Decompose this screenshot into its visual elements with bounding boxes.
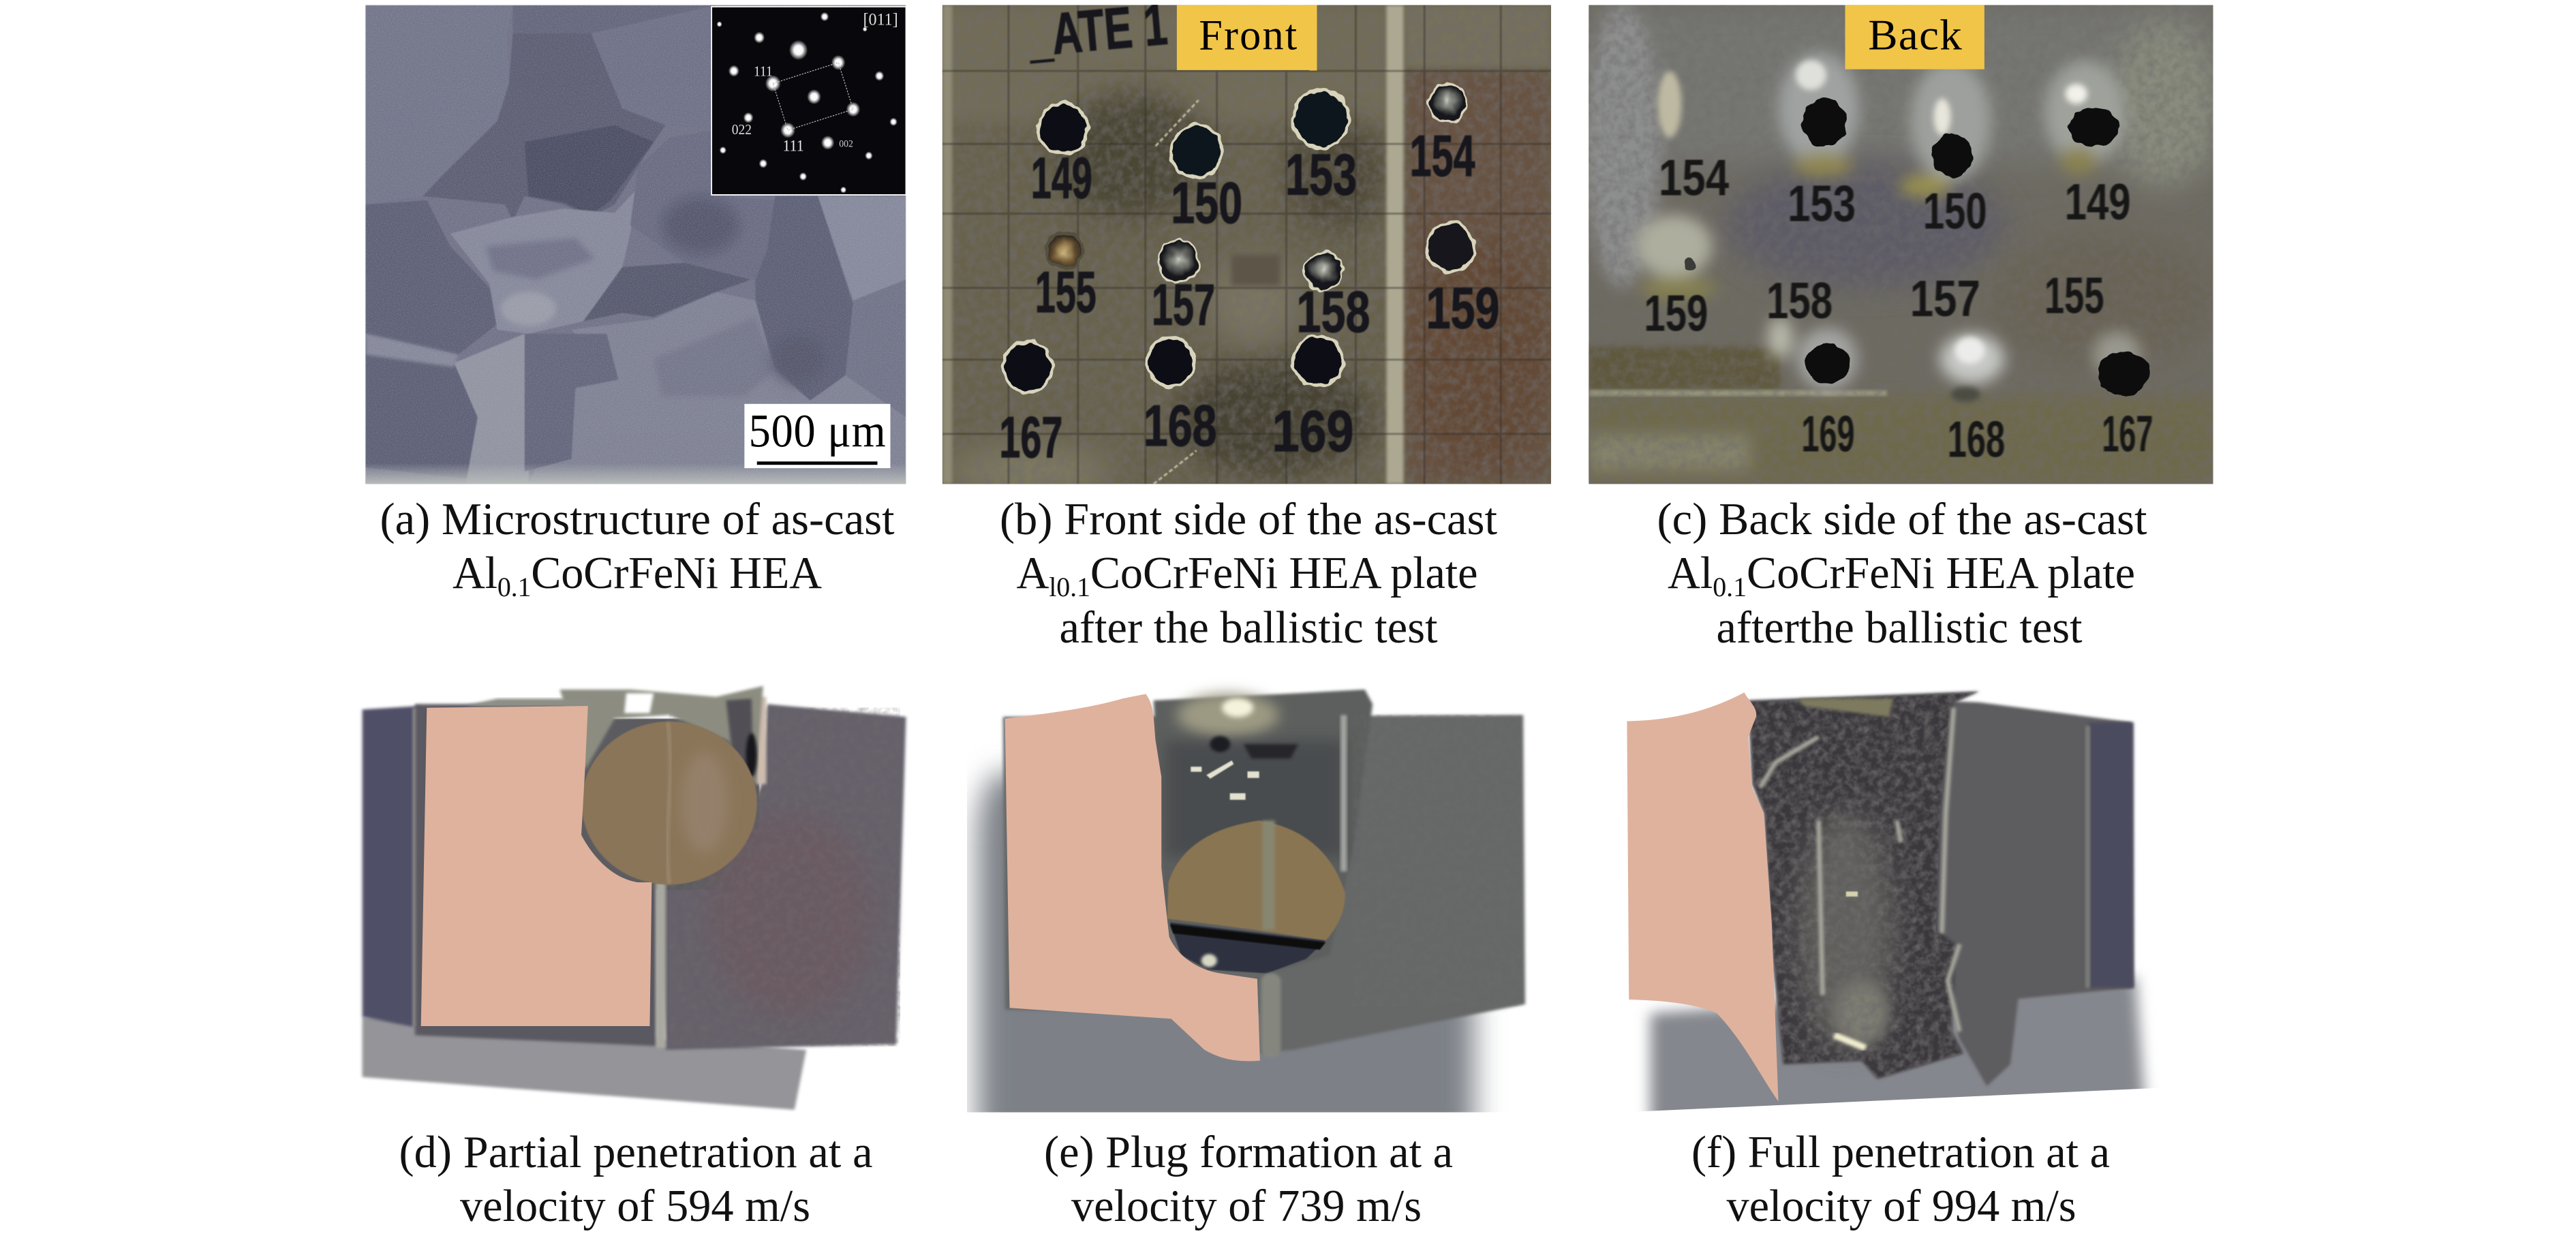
inset: diffraction pattern: 022: [732, 123, 752, 138]
caption b: A: [1017, 548, 1049, 598]
bullet holes, front: [1003, 84, 1474, 392]
label: Back: [1845, 5, 1984, 69]
caption f: [1691, 1128, 2110, 1231]
handwritten shot numbers, front: 150: [1171, 170, 1242, 235]
handwritten shot numbers, back: 149: [2065, 174, 2131, 230]
inset: diffraction pattern: [711, 7, 906, 195]
caption b: [1000, 495, 1498, 653]
handwritten shot numbers, back: 167: [2102, 405, 2153, 462]
inset: diffraction pattern: 002: [839, 138, 853, 150]
panel c: back side of plate: [1584, 4, 2219, 484]
handwritten shot numbers, back: 150: [1923, 183, 1987, 239]
fractured projectile: [1167, 820, 1345, 974]
caption a: 0.1: [497, 572, 531, 602]
caption e: velocity of 739 m/s: [1071, 1181, 1422, 1231]
bright plate dents: [1636, 52, 2141, 402]
handwritten shot numbers, back: 153: [1788, 175, 1856, 232]
caption b: (b) Front side of the as-cast: [1000, 495, 1498, 544]
panel d: partial penetration section: [363, 686, 906, 1110]
caption c: [1657, 495, 2147, 653]
caption b: after the ballistic test: [1059, 603, 1438, 653]
handwritten shot numbers, front: 167: [999, 404, 1062, 469]
caption d: velocity of 594 m/s: [460, 1181, 810, 1231]
handwritten shot numbers, front: [999, 0, 1499, 469]
highlighted plate section: [1627, 692, 1779, 1102]
handwritten shot numbers, back: 155: [2044, 267, 2104, 324]
caption f: velocity of 994 m/s: [1727, 1181, 2076, 1231]
inset: diffraction pattern: 111: [754, 64, 773, 80]
caption e: (e) Plug formation at a: [1044, 1128, 1453, 1177]
panel b: front side of plate: [942, 0, 1552, 497]
caption c: 0.1: [1713, 572, 1747, 602]
handwritten shot numbers, back: 154: [1659, 149, 1729, 206]
caption d: [399, 1128, 872, 1231]
label: Front: Front: [1199, 11, 1298, 59]
inset: diffraction pattern: 111: [783, 137, 804, 155]
handwritten shot numbers, front: 157: [1152, 272, 1215, 337]
handwritten shot numbers, back: [1644, 149, 2153, 467]
caption b: l0.1: [1049, 572, 1090, 602]
bullet holes, back: [1684, 99, 2149, 396]
handwritten shot numbers, front: 169: [1272, 398, 1353, 463]
caption c: Al: [1668, 548, 1713, 598]
handwritten shot numbers, back: 157: [1910, 270, 1980, 327]
caption e: [1044, 1128, 1453, 1231]
highlighted plate section: [1005, 694, 1260, 1061]
handwritten shot numbers, front: 159: [1426, 275, 1499, 341]
handwritten shot numbers, front: 149: [1031, 144, 1092, 210]
caption a: CoCrFeNi HEA: [531, 548, 822, 598]
handwritten shot numbers, back: 168: [1948, 411, 2005, 467]
panel a: microstructure micrograph: [365, 5, 906, 484]
panel f: full penetration section: [1627, 690, 2147, 1141]
caption a: (a) Microstructure of as-cast: [380, 495, 895, 544]
handwritten shot numbers, back: 159: [1644, 285, 1708, 341]
handwritten shot numbers, front: 153: [1285, 142, 1357, 207]
scale bar: 500 um: 500 μm: [749, 405, 886, 457]
caption f: (f) Full penetration at a: [1691, 1128, 2110, 1177]
label: Back: Back: [1868, 11, 1963, 59]
caption d: (d) Partial penetration at a: [399, 1128, 872, 1177]
caption a: [380, 495, 895, 602]
handwritten shot numbers, front: 158: [1297, 279, 1370, 344]
caption c: CoCrFeNi HEA plate: [1747, 548, 2135, 598]
caption c: afterthe ballistic test: [1716, 603, 2083, 653]
projectile disc: [582, 722, 757, 884]
highlighted plate section: [421, 706, 651, 1026]
caption b: CoCrFeNi HEA plate: [1090, 548, 1477, 598]
caption a: Al: [453, 548, 497, 598]
caption c: (c) Back side of the as-cast: [1657, 495, 2147, 544]
handwritten shot numbers, back: 158: [1766, 273, 1833, 329]
handwritten shot numbers, back: 169: [1801, 405, 1855, 462]
inset: diffraction pattern: [011]: [863, 10, 898, 29]
label: Front: [1177, 5, 1317, 70]
panel e: plug formation section: [977, 690, 1525, 1141]
handwritten shot numbers, front: 155: [1035, 259, 1097, 324]
handwritten shot numbers, front: 168: [1144, 392, 1217, 458]
handwritten shot numbers, front: 154: [1410, 123, 1475, 188]
